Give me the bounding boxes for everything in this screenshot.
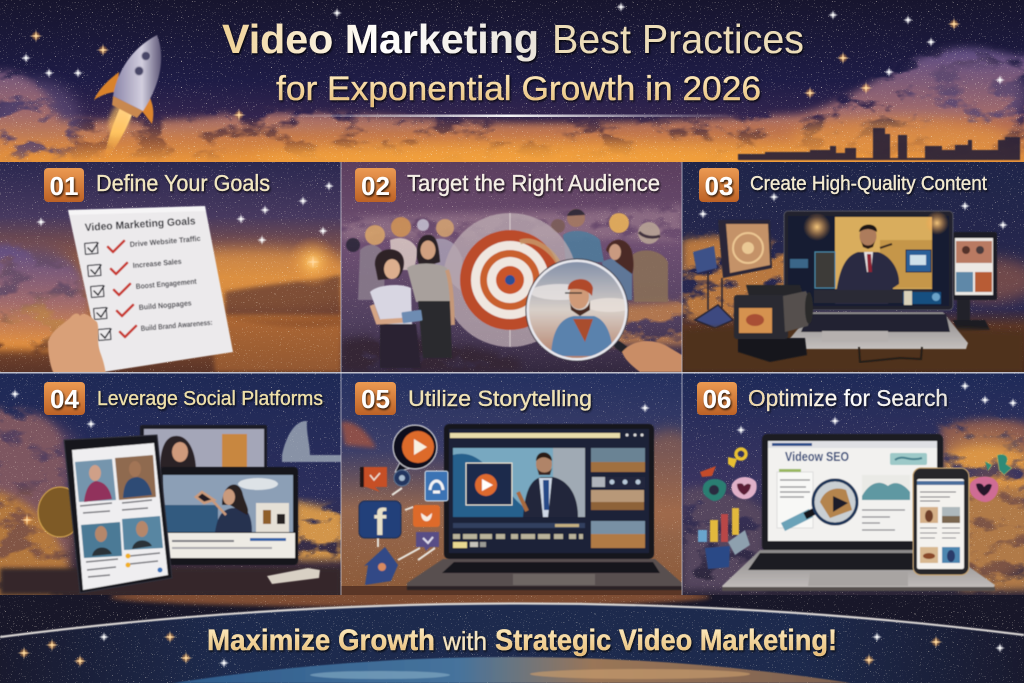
icon: hand holding paper xyxy=(48,314,106,378)
goals checklist paper: Build Brand Awareness: xyxy=(140,318,213,333)
skyline silhouette xyxy=(738,128,1020,160)
floating icons right xyxy=(970,454,1012,502)
heading 02: Target the Right Audience xyxy=(407,170,660,196)
person: woman in blue xyxy=(602,240,634,300)
goals checklist paper: Increase Sales xyxy=(132,257,182,270)
desk surface xyxy=(0,568,341,595)
badge 02 xyxy=(355,168,396,202)
header section xyxy=(0,0,1024,172)
badge 03: 03 xyxy=(705,171,733,201)
earth horizon xyxy=(173,657,851,683)
ringed planet xyxy=(37,486,74,538)
footer banner xyxy=(0,587,1024,683)
icon: magnifying glass with man xyxy=(525,258,682,372)
badge 06: 06 xyxy=(703,384,731,414)
laptop with seo page xyxy=(722,434,995,591)
icon: facebook xyxy=(359,501,401,544)
laptop with presenter xyxy=(784,211,968,349)
left softbox light on stand xyxy=(693,220,772,328)
icon: blue pennant xyxy=(364,547,398,585)
goals checklist paper: Build Nogpages xyxy=(138,298,192,312)
banner arc line xyxy=(0,603,1024,637)
icon: rocket xyxy=(94,35,161,161)
heading 01: Define Your Goals xyxy=(96,170,270,196)
goals checklist paper xyxy=(68,206,233,372)
icon: play speech bubble xyxy=(393,425,437,472)
icon: orange card xyxy=(413,505,440,527)
large monitor with woman xyxy=(160,467,298,565)
badge 04: 04 xyxy=(50,384,79,414)
smartphone xyxy=(913,468,969,575)
panel 01: define your goals xyxy=(0,162,341,372)
icon: facebook: f xyxy=(374,502,387,544)
panel 04: leverage social platforms xyxy=(0,373,345,600)
header bright stars xyxy=(20,2,1006,122)
tablet with social feed xyxy=(64,435,172,593)
laptop with seo page: Videow SEO xyxy=(785,449,849,464)
icon: mail tag xyxy=(360,467,387,492)
floating icons left xyxy=(698,449,757,569)
right monitor xyxy=(953,232,997,332)
social icon cluster xyxy=(359,425,448,585)
icon: purple tag xyxy=(416,532,439,551)
banner tagline: Maximize Growth xyxy=(207,624,435,657)
person: woman with tablet xyxy=(370,249,423,368)
panel 05: utilize storytelling xyxy=(341,373,710,595)
icon: connector lines xyxy=(378,488,435,560)
badge 01 xyxy=(44,168,84,202)
heading 05: Utilize Storytelling xyxy=(408,386,592,411)
panel 06: optimize for search xyxy=(682,373,1024,595)
badge 05 xyxy=(355,382,396,415)
banner tagline xyxy=(207,624,837,657)
person: woman with dark hair, beige top xyxy=(407,235,453,358)
badge 01: 01 xyxy=(50,171,78,201)
upper monitor xyxy=(140,425,267,475)
icon: small circle xyxy=(394,470,410,486)
title line 2: for Exponential Growth in 2026 xyxy=(276,70,761,108)
badge 02: 02 xyxy=(361,171,390,201)
background audience figures xyxy=(346,209,668,302)
icon: video camera xyxy=(734,285,813,362)
banner tagline: Strategic Video Marketing! xyxy=(495,624,837,657)
heading 03: Create High-Quality Content xyxy=(750,173,987,195)
panel 02: target the right audience xyxy=(341,162,690,372)
heading 06: Optimize for Search xyxy=(748,385,948,411)
wooden desk xyxy=(682,325,1024,372)
goals checklist paper: Boost Engagement xyxy=(135,277,197,291)
title line 1 xyxy=(222,24,805,64)
panel 03: create high-quality content xyxy=(682,162,1024,372)
glasses xyxy=(859,347,922,362)
icon: target bullseye xyxy=(443,213,577,347)
icon: blue share card xyxy=(425,471,448,501)
laptop with video editor xyxy=(407,424,682,590)
distant city xyxy=(282,421,341,462)
badge 05: 05 xyxy=(361,384,390,414)
banner tagline: with xyxy=(442,626,487,656)
title line 1: Video Marketing xyxy=(222,16,539,62)
goals checklist paper: Drive Website Traffic xyxy=(129,234,201,249)
small device on desk xyxy=(267,568,320,584)
badge 06 xyxy=(697,382,737,415)
goals checklist paper: Video Marketing Goals xyxy=(84,215,196,234)
heading 04: Leverage Social Platforms xyxy=(97,388,323,410)
checklist item rows xyxy=(85,241,136,341)
badge 04 xyxy=(44,382,85,415)
badge 03 xyxy=(699,168,739,202)
title line 1: Best Practices xyxy=(552,16,804,62)
